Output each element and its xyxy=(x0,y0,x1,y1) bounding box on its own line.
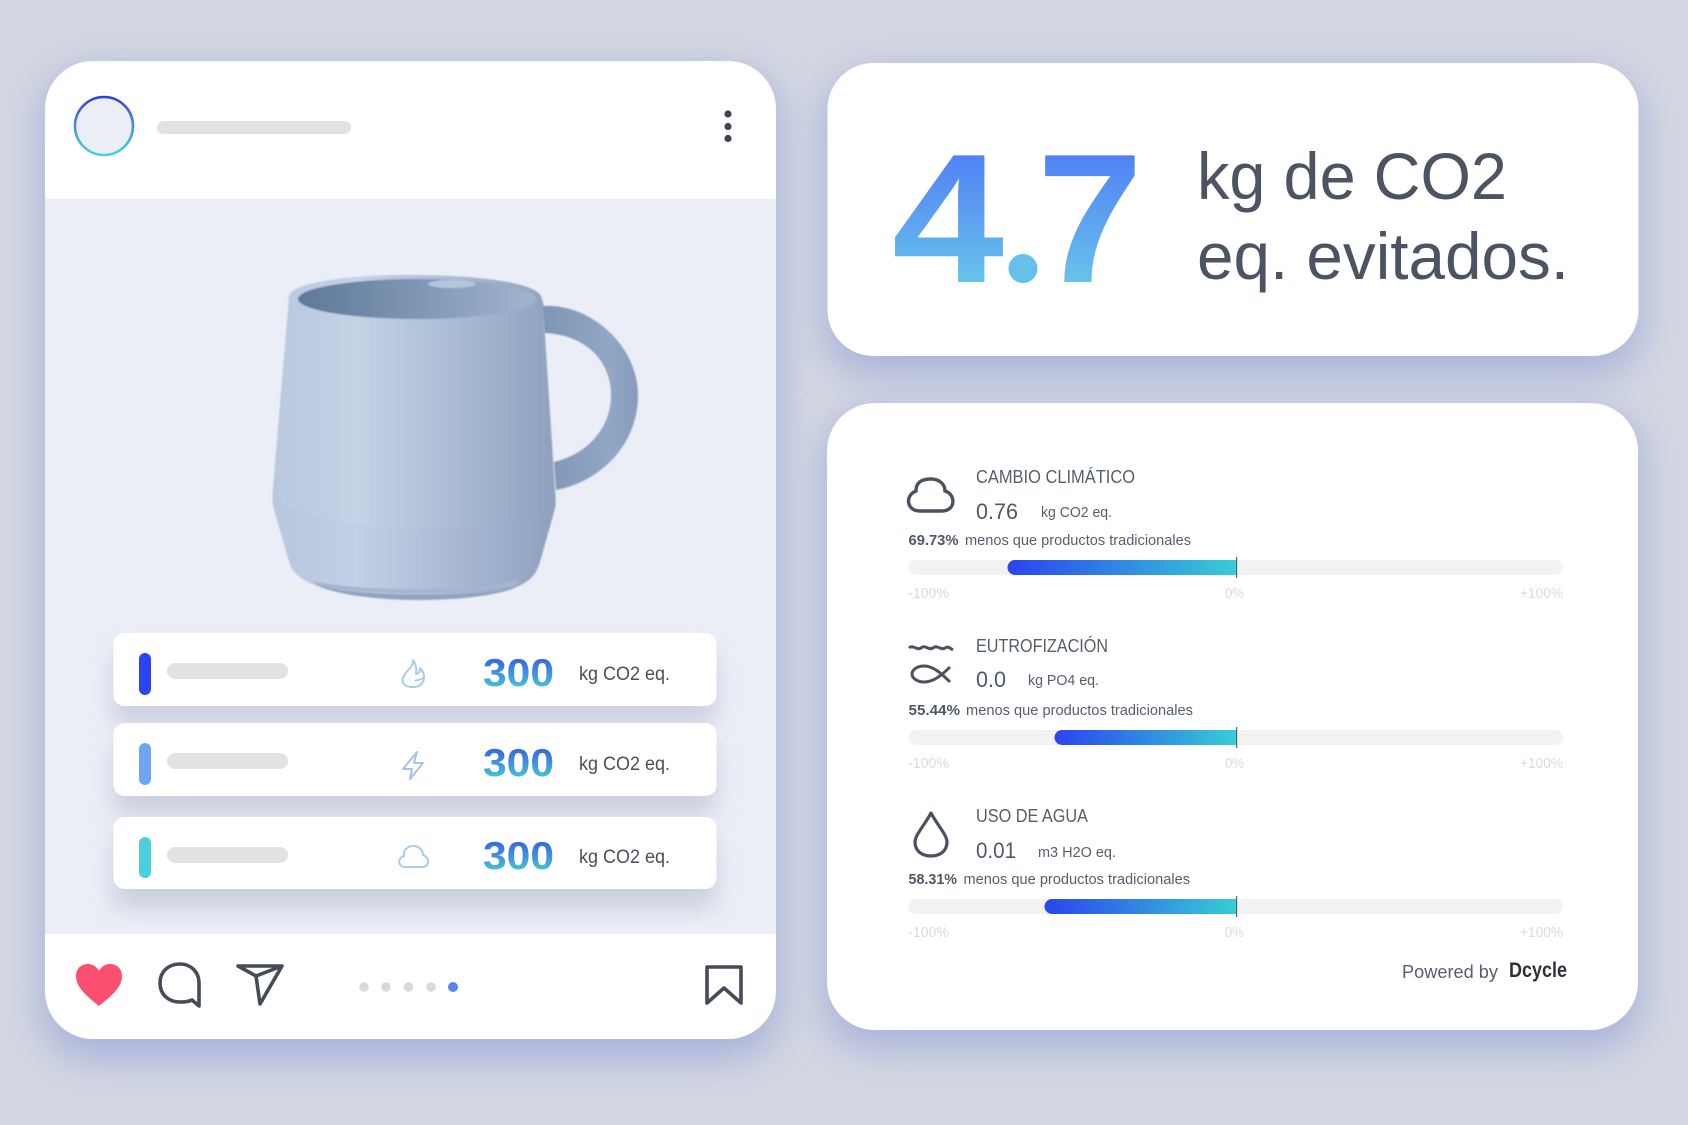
big number: . xyxy=(1018,231,1032,287)
row: flame emissions: kg CO2 eq. xyxy=(579,664,670,685)
row: flame emissions: 300 xyxy=(483,652,554,695)
icon: send xyxy=(238,966,282,1004)
progress bar xyxy=(908,727,1563,748)
panel: product post card xyxy=(45,61,776,1039)
indicator: water use: -100% xyxy=(908,925,949,941)
mug illustration xyxy=(272,275,638,600)
row: electricity emissions: 300 xyxy=(483,742,554,785)
icon: heart xyxy=(76,964,122,1006)
icon: flame xyxy=(403,660,424,687)
product image area xyxy=(45,199,776,934)
indicator: water use: m3 H2O eq. xyxy=(1038,844,1116,861)
indicator: eutrophication: menos que productos tradicionales xyxy=(966,702,1193,719)
indicator: water use: menos que productos tradicionales xyxy=(964,871,1190,888)
username placeholder xyxy=(157,121,351,134)
indicator: water use: 0.01 xyxy=(976,838,1016,863)
icon: lightning bolt xyxy=(403,752,423,779)
icon: cloud xyxy=(909,479,953,511)
indicator: eutrophication: 55.44% xyxy=(908,703,960,719)
indicator: eutrophication: +100% xyxy=(1520,756,1563,772)
indicator: climate change xyxy=(908,467,1563,602)
indicator: climate change: CAMBIO CLIMÁTICO xyxy=(976,467,1135,487)
indicator: water use: +100% xyxy=(1520,925,1563,941)
indicator: climate change: -100% xyxy=(908,586,949,602)
panel: avoided CO2 headline xyxy=(828,63,1638,356)
indicator: eutrophication: -100% xyxy=(908,756,949,772)
indicator: eutrophication: 0.0 xyxy=(976,667,1006,692)
indicator: water use: 58.31% xyxy=(908,872,957,888)
row: electricity emissions: kg CO2 eq. xyxy=(579,754,670,775)
indicator: water use: USO DE AGUA xyxy=(976,806,1088,826)
indicator: eutrophication: 0% xyxy=(1225,756,1244,772)
progress bar xyxy=(908,896,1563,917)
icon: waves and fish xyxy=(909,647,953,682)
icon: water drop xyxy=(915,813,947,856)
indicator: climate change: 69.73% xyxy=(908,533,959,549)
powered by credit: Powered by xyxy=(1402,962,1498,982)
big number xyxy=(892,115,1143,321)
icon: more menu xyxy=(724,110,732,142)
indicator: eutrophication xyxy=(908,635,1563,772)
headline text: kg de CO2 xyxy=(1197,139,1507,213)
progress bar xyxy=(908,557,1563,578)
headline text xyxy=(1197,139,1569,293)
icon: cloud xyxy=(399,846,428,867)
indicator: climate change: kg CO2 eq. xyxy=(1041,504,1112,521)
indicator: climate change: menos que productos tradicionales xyxy=(965,532,1191,549)
icon: avatar ring xyxy=(75,97,133,155)
carousel dots xyxy=(359,982,458,992)
indicator: water use xyxy=(908,806,1563,941)
indicator: water use: 0% xyxy=(1225,925,1244,941)
headline text: eq. evitados. xyxy=(1197,219,1569,293)
big number: 4 xyxy=(892,115,1004,321)
row: cloud emissions: 300 xyxy=(483,835,554,878)
indicator: climate change: 0% xyxy=(1225,586,1244,602)
powered by credit: Dcycle xyxy=(1509,959,1567,982)
row: cloud emissions xyxy=(113,817,716,909)
indicator: eutrophication: EUTROFIZACIÓN xyxy=(976,635,1108,656)
big number: 7 xyxy=(1037,115,1143,321)
indicator: eutrophication: kg PO4 eq. xyxy=(1028,672,1099,689)
row: cloud emissions: kg CO2 eq. xyxy=(579,847,670,868)
indicator: climate change: 0.76 xyxy=(976,499,1018,524)
panel: impact indicators xyxy=(827,403,1638,1030)
indicator: climate change: +100% xyxy=(1520,586,1563,602)
powered by credit xyxy=(1402,959,1567,982)
icon: comment bubble xyxy=(160,964,199,1006)
row: flame emissions xyxy=(113,633,716,725)
icon: bookmark xyxy=(707,967,741,1003)
row: electricity emissions xyxy=(113,723,716,815)
